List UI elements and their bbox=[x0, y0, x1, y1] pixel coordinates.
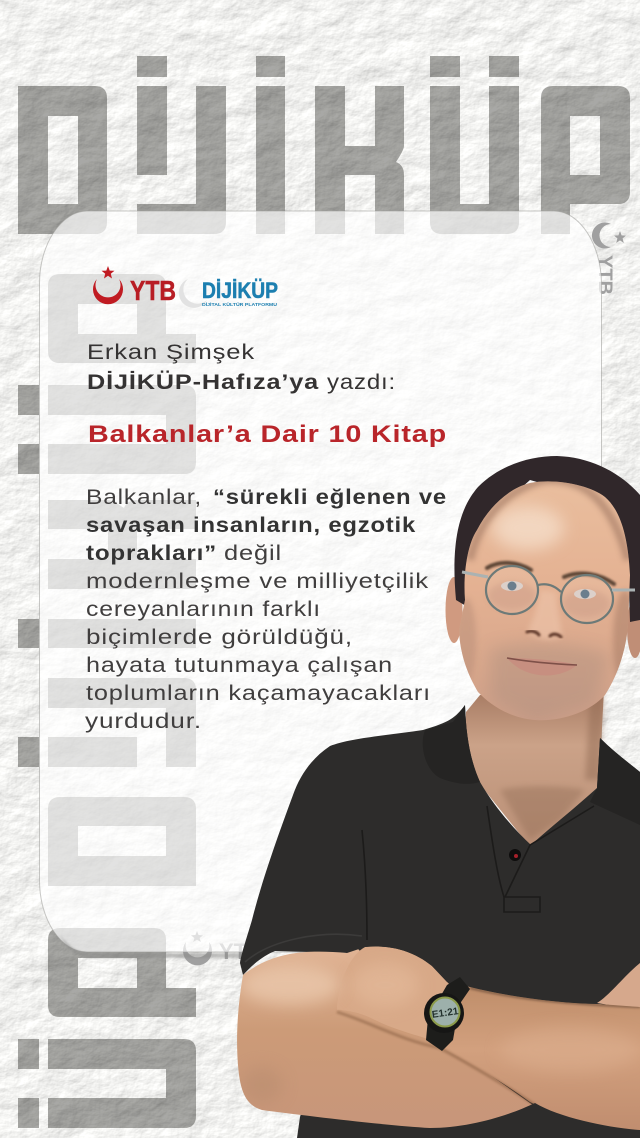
neck side shadow bbox=[585, 695, 604, 780]
right hand at edge bbox=[597, 963, 640, 1010]
glasses bbox=[462, 566, 635, 623]
watermark: rotated YTB mark top right bbox=[592, 222, 626, 295]
right cheek shadow bbox=[612, 592, 629, 675]
heading: Balkanlar’a Dair 10 Kitap bbox=[88, 421, 447, 448]
logo wordmark: YTB: YTB bbox=[130, 275, 176, 306]
eye socket shading bbox=[489, 584, 535, 609]
shirt button bbox=[509, 849, 521, 861]
watermark: rotated YTB mark top right: YTB bbox=[594, 255, 615, 295]
text block: body paragraph: “sürekli eğlenen ve bbox=[213, 486, 447, 509]
left cheek shadow bbox=[459, 598, 476, 678]
text block: body paragraph: toplumların kaçamayacakları bbox=[86, 682, 431, 705]
text block: author bbox=[87, 341, 396, 394]
text block: body paragraph: modernleşme ve milliyetçilik bbox=[86, 570, 429, 593]
text block: body paragraph: hayata tutunmaya çalışan bbox=[86, 654, 393, 677]
right forearm bbox=[442, 980, 640, 1135]
left upper arm and forearm bbox=[237, 949, 532, 1128]
watch case bbox=[424, 993, 464, 1033]
neck and chest bbox=[464, 690, 604, 848]
watch display: E1:21 bbox=[431, 1006, 460, 1021]
panel: translucent rounded card bbox=[40, 211, 602, 958]
text block: body paragraph: değil bbox=[224, 542, 282, 565]
source line bold: DİJİKÜP-Hafıza’ya bbox=[87, 371, 319, 394]
hand bbox=[337, 946, 450, 1042]
collar left bbox=[423, 705, 480, 784]
portrait: man with crossed arms bbox=[230, 456, 640, 1138]
face bbox=[459, 481, 630, 720]
text block: body paragraph: toprakları” bbox=[86, 542, 217, 565]
text block: body paragraph: Balkanlar, bbox=[86, 486, 202, 509]
logo subtitle: DİJİTAL KÜLTÜR PLATFORMU bbox=[202, 301, 278, 307]
watch bbox=[424, 977, 470, 1051]
eyes bbox=[501, 581, 596, 599]
eyebrows bbox=[487, 563, 614, 584]
hairline shadow bbox=[470, 480, 628, 560]
text block: body paragraph: cereyanlarının farklı bbox=[86, 598, 321, 621]
watermark logotype: vertical block lettering, lower loop bbox=[18, 928, 196, 1128]
shirt bbox=[240, 705, 640, 1138]
watch strap bbox=[426, 977, 470, 1051]
arm light and shadow bbox=[240, 965, 340, 1005]
panel lower edge shadow bbox=[60, 935, 248, 958]
mouth bbox=[507, 658, 577, 675]
watermark logotype: horizontal block lettering bbox=[18, 56, 630, 234]
icon: crescent bbox=[93, 279, 123, 304]
text block: body paragraph bbox=[85, 486, 447, 733]
watermark logotype: vertical block lettering, upper loop bbox=[18, 274, 196, 886]
collar right bbox=[590, 738, 640, 825]
nose bbox=[528, 590, 562, 639]
text block: body paragraph: biçimlerde görüldüğü, bbox=[86, 626, 353, 649]
arms bbox=[230, 940, 640, 1138]
placket and sleeve seams bbox=[245, 806, 594, 962]
logo: DİJİKÜP bbox=[202, 278, 278, 307]
logo wordmark: DİJİKÜP: DİJİKÜP bbox=[202, 278, 278, 303]
watermark: faint YTB crescent behind logos bbox=[179, 279, 207, 308]
chest hair shading bbox=[500, 786, 585, 840]
forehead highlight bbox=[492, 506, 564, 550]
hair bbox=[454, 456, 640, 622]
watermark: YTB mark bottom bbox=[183, 931, 263, 965]
author name: Erkan Şimşek bbox=[87, 341, 255, 364]
beard shading bbox=[490, 643, 610, 722]
text block: body paragraph: savaşan insanların, egzotik bbox=[86, 514, 416, 537]
ears bbox=[446, 577, 462, 643]
logo: YTB bbox=[93, 266, 176, 306]
watch bezel bbox=[430, 998, 460, 1026]
text block: body paragraph: yurdudur. bbox=[85, 710, 202, 733]
watermark: YTB mark bottom: YTB bbox=[219, 939, 263, 964]
icon: star bbox=[102, 266, 114, 278]
source line regular: yazdı: bbox=[327, 371, 396, 394]
